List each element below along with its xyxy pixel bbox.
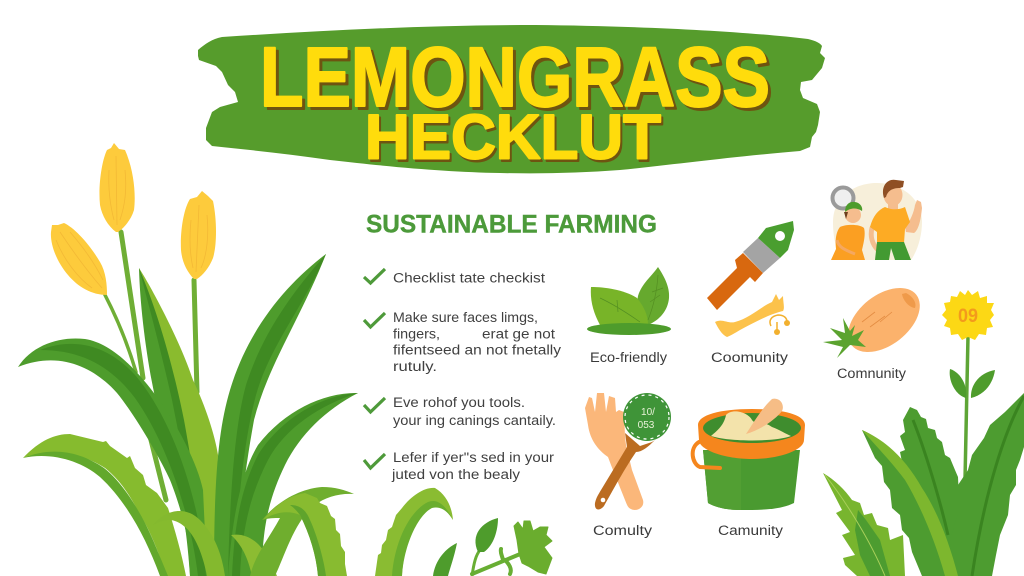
check item 2 xyxy=(364,310,562,375)
flower bud right xyxy=(181,191,216,279)
icon: brush and root, community xyxy=(707,221,794,366)
icon: hand, spoon and badge xyxy=(585,393,671,539)
check item 4: juted von the bealy xyxy=(391,467,521,483)
badge text: 10/ xyxy=(641,407,655,418)
small arched leaf xyxy=(153,511,225,576)
icon: hand, spoon and badge: 053 xyxy=(638,420,655,431)
label: Comnunity xyxy=(837,366,907,382)
icon: sunflower plant right xyxy=(942,290,995,480)
light leaf front xyxy=(862,430,958,576)
tall centre leaf xyxy=(139,268,218,576)
title line 1: LEMONGRASS xyxy=(260,30,770,124)
heading: sustainable farming: SUSTAINABLE FARMING xyxy=(366,210,657,238)
check item 3: Eve rohof you tools. xyxy=(393,395,525,411)
herb sprig xyxy=(433,518,552,576)
check item 4: Lefer if yer''s sed in your xyxy=(393,450,554,466)
check item 1: Checklist tate checkist xyxy=(393,270,545,286)
stems xyxy=(105,232,197,500)
icon: sweet root with grass xyxy=(823,275,932,382)
title line 2: HECKLUT xyxy=(365,102,661,172)
check item 3: your ing canings cantaily. xyxy=(393,413,556,429)
check item 2: rutuly. xyxy=(393,359,437,375)
label: Comulty xyxy=(593,523,653,539)
low right leaf xyxy=(228,393,358,576)
small lower leaf xyxy=(823,473,905,576)
flower number: 09 xyxy=(958,306,978,327)
panel: title banner xyxy=(198,25,825,175)
label: Camunity xyxy=(718,523,784,539)
leaf back left xyxy=(890,407,960,576)
check item 2: fifentseed an not fnetally xyxy=(393,342,562,358)
serrated lower left leaf xyxy=(23,434,186,576)
child xyxy=(831,202,865,260)
banner brush shape xyxy=(198,25,825,173)
serrated arch leaves centre xyxy=(250,487,354,576)
label: Coomunity xyxy=(711,350,789,366)
label: Eco-friendly xyxy=(590,350,668,366)
check item 3 xyxy=(364,395,556,429)
icon: bucket xyxy=(693,399,805,539)
flower bud top xyxy=(99,143,135,232)
title line 2: HECKLUT xyxy=(367,105,663,175)
checklist xyxy=(364,269,562,483)
icon: people with magnifier xyxy=(831,180,922,260)
check item 2: fingers, xyxy=(393,326,440,342)
icon: leaves, eco-friendly xyxy=(587,267,671,366)
serrated arch leaf right xyxy=(375,488,453,576)
tall right leaf xyxy=(214,254,326,576)
arching leaf xyxy=(18,338,207,576)
check item 2: erat ge not xyxy=(482,326,555,342)
leaf back right xyxy=(950,393,1024,576)
check item 4 xyxy=(364,450,554,483)
flower bud left xyxy=(51,223,107,295)
illustration: serrated leaves right xyxy=(823,393,1024,576)
light short leaf xyxy=(231,535,277,576)
check item 2: Make sure faces limgs, xyxy=(393,310,538,326)
man xyxy=(870,180,922,260)
title line 1: LEMONGRASS xyxy=(263,33,773,127)
illustration: lemongrass plant left xyxy=(18,143,552,576)
